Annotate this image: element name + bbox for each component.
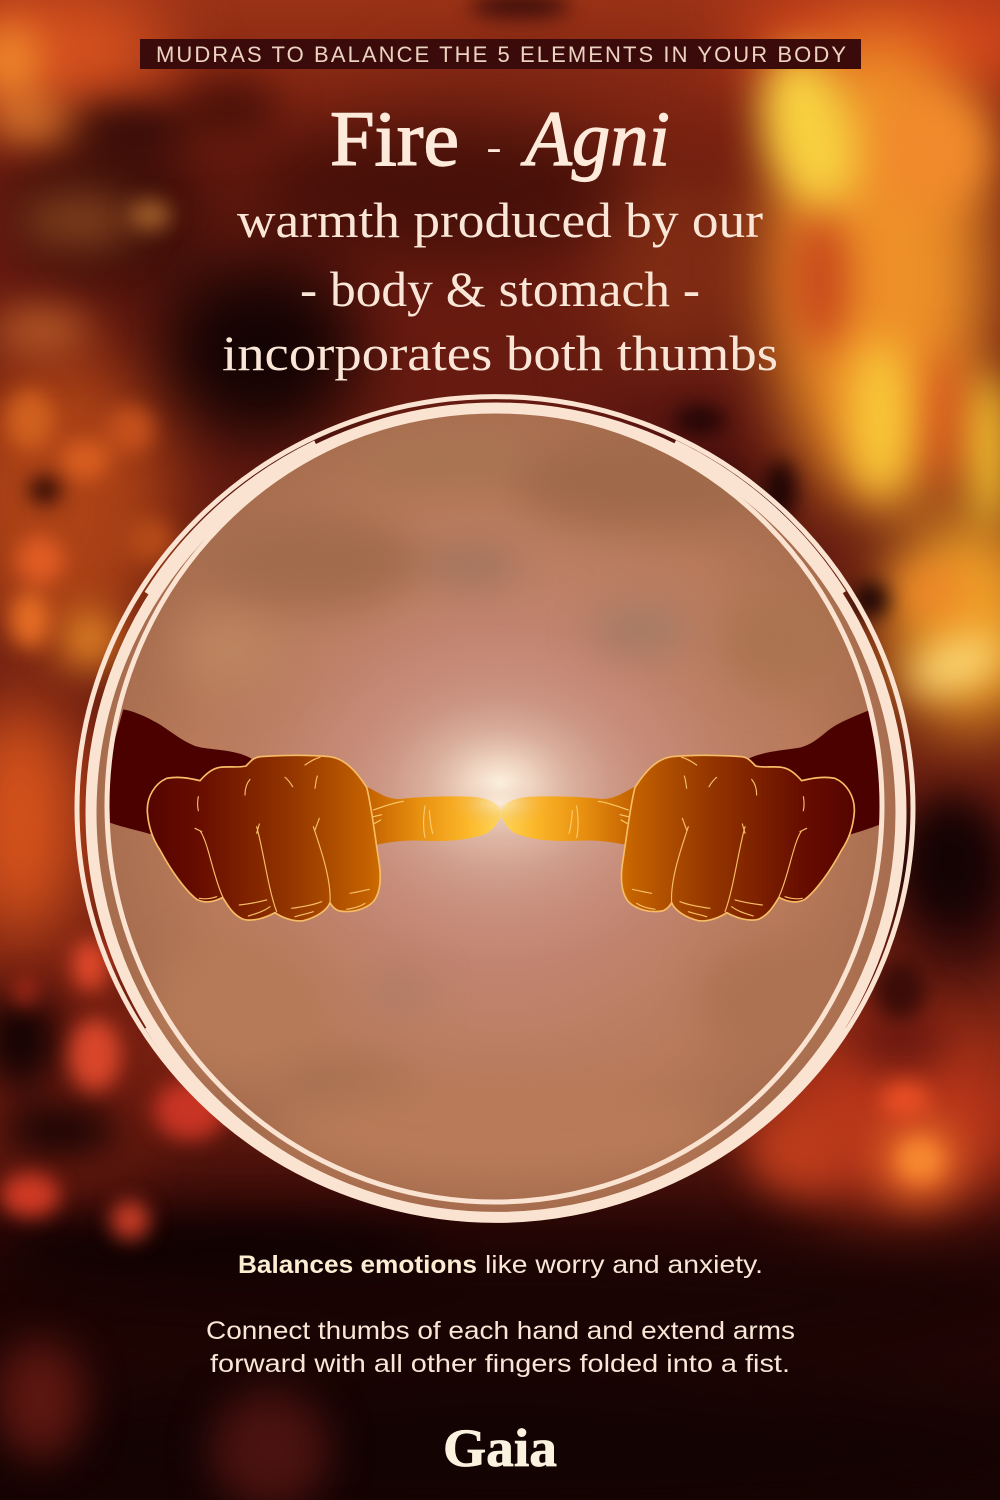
subtitle <box>222 192 778 381</box>
panel: circle with mudra illustration <box>77 397 913 1220</box>
left hand <box>108 709 503 921</box>
title: Fire <box>330 95 459 182</box>
right arm <box>748 711 881 837</box>
right fist <box>621 755 854 921</box>
subtitle: - body & stomach - <box>300 261 700 317</box>
disc background <box>91 408 901 1218</box>
left finger lines <box>195 757 369 917</box>
body text: Balances emotions <box>238 1251 477 1279</box>
center light glow <box>450 779 550 827</box>
title: - <box>486 127 502 168</box>
right thumb <box>500 787 635 845</box>
title <box>330 95 670 182</box>
left arm <box>108 709 252 837</box>
body text: Connect thumbs of each hand and extend arms <box>206 1317 795 1345</box>
subtitle: incorporates both thumbs <box>222 325 778 381</box>
left fist <box>147 755 380 921</box>
subtitle: warmth produced by our <box>237 192 763 248</box>
left thumb <box>367 787 503 845</box>
body text: forward with all other fingers folded into a fist. <box>210 1350 790 1378</box>
right finger lines <box>632 757 807 917</box>
body text <box>206 1251 795 1378</box>
title: Agni <box>520 95 670 182</box>
body text: like worry and anxiety. <box>485 1251 763 1279</box>
right hand <box>500 711 881 921</box>
top banner: MUDRAS TO BALANCE THE 5 ELEMENTS IN YOUR BODY <box>156 42 846 67</box>
logo: Gaia: Gaia <box>443 1418 557 1478</box>
rings <box>77 397 913 1220</box>
